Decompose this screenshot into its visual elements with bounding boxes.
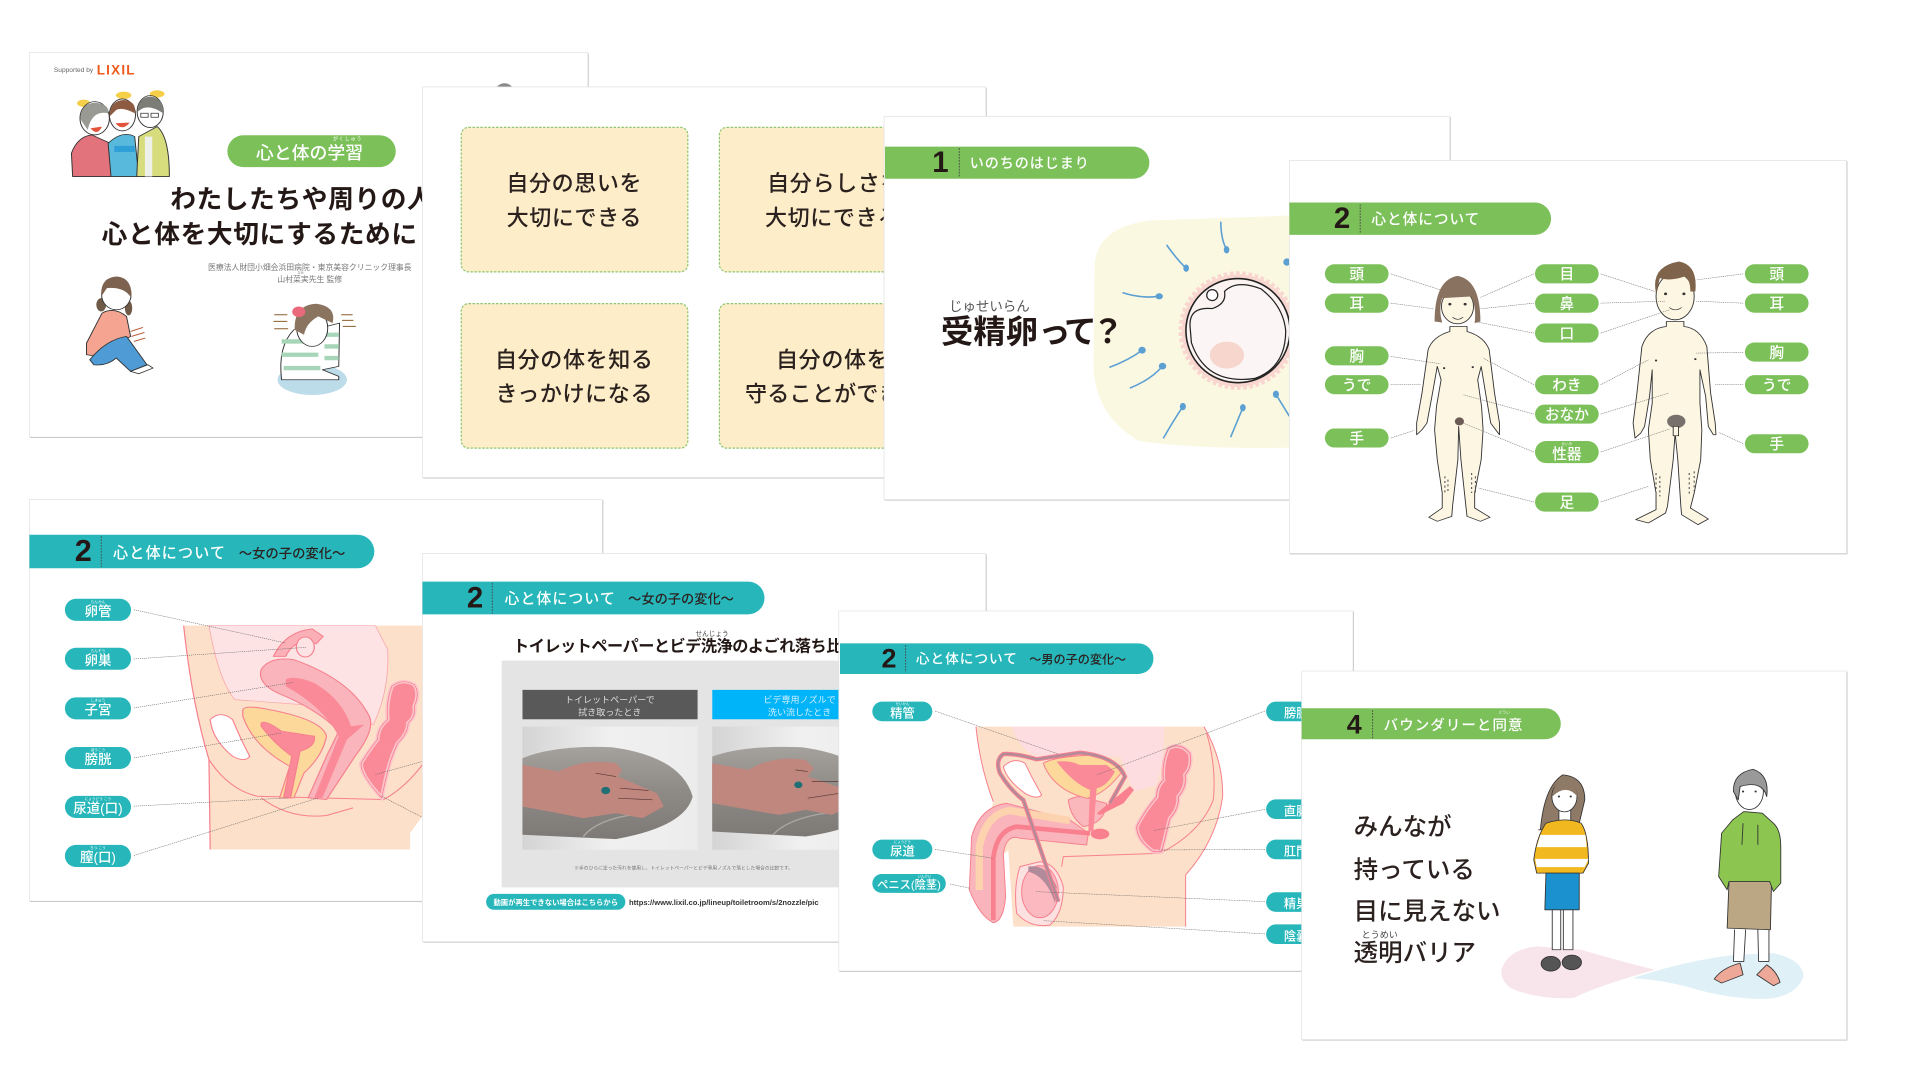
card: 自分の体を知る — [461, 304, 688, 448]
labels: centre column pills: 足 — [1560, 495, 1575, 511]
header: いのちのはじまり: いのちのはじまり — [970, 155, 1090, 171]
labels: male anatomy pills: 精管 — [890, 706, 915, 721]
panel: slide 8 boundary and consent — [1302, 671, 1847, 1040]
labels: male anatomy pills: せいかん — [896, 701, 910, 706]
label: toilet paper bar: トイレットペーパーで — [565, 695, 655, 705]
labels: male anatomy pills: ペニス(陰茎) — [877, 877, 941, 891]
header: バウンダリーと同意: バウンダリーと同意 — [1384, 716, 1524, 734]
card: 自分の体を守ることができる: 守ることができる — [745, 382, 923, 407]
panel: slide 5 female anatomy — [29, 500, 603, 902]
header: 心と体について 男の子の変化: 2 — [881, 643, 896, 673]
panel: slide 3 fertilised egg — [884, 116, 1451, 500]
photo: hand after toilet paper — [522, 727, 698, 850]
labels: male anatomy pills: 精巣 — [1284, 896, 1308, 911]
labels: left column pills: 耳 — [1349, 297, 1364, 313]
heading: comparison title: せんじょう — [696, 630, 729, 638]
icon: girl with headache — [273, 304, 356, 395]
illustration: egg and sperm — [1093, 214, 1322, 448]
header: 心と体について 男の子の変化: 心と体について — [916, 652, 1018, 667]
labels: female anatomy pills: 膀胱 — [85, 751, 112, 767]
text: supervisor — [208, 262, 412, 284]
card: 自分の思いを大切にできる: 大切にできる — [507, 205, 642, 230]
labels: centre column pills: わき — [1552, 377, 1582, 394]
text: みんなが持っている目に見えない透明バリア: とうめい — [1362, 930, 1398, 940]
labels: female anatomy pills: 膣(口) — [80, 850, 116, 865]
labels: right column pills: 手 — [1769, 436, 1784, 453]
labels: female anatomy pills: らんかん — [91, 599, 106, 604]
card: 自分の体を知る: きっかけになる — [495, 382, 653, 407]
labels: centre column pills: せいき — [1561, 441, 1573, 446]
panel: slide 1 cover — [29, 53, 588, 438]
labels: male anatomy pills — [872, 701, 1326, 944]
text: みんなが持っている目に見えない透明バリア — [1354, 813, 1500, 967]
header: バウンダリーと同意 — [1302, 708, 1561, 739]
labels: right column pills: うで — [1762, 377, 1791, 394]
header: 心と体について 女の子の変化: 2 — [467, 581, 483, 614]
labels: female anatomy pills: ちつ こう — [90, 845, 106, 850]
labels: female anatomy pills — [65, 599, 131, 867]
logo: supported by LIXIL — [54, 63, 136, 78]
labels: male anatomy pills: 直腸 — [1284, 803, 1308, 818]
icon: girl holding stomach — [87, 276, 153, 374]
label: bidet bar: 洗い流したとき — [768, 707, 831, 718]
title: わたしたちや周りの人 — [170, 185, 433, 214]
label: bidet bar — [712, 690, 887, 719]
card: 自分の体を守ることができる — [719, 304, 946, 448]
chart: male anatomy diagram — [935, 711, 1265, 934]
panel: grey video frame — [502, 661, 869, 887]
card: 自分の体を知る: 自分の体を知る — [495, 347, 654, 372]
logo: supported by LIXIL: LIXIL — [97, 63, 136, 78]
header: 心と体について 男の子の変化: ～男の子の変化～ — [1029, 651, 1126, 666]
header: 心と体について: 2 — [1334, 202, 1350, 235]
header: 心と体について 女の子の変化: 心と体について — [113, 545, 226, 562]
header: いのちのはじまり: 1 — [932, 146, 949, 179]
label: toilet paper bar — [522, 690, 698, 719]
labels: female anatomy pills: 卵巣 — [85, 652, 112, 668]
labels: female anatomy pills: にょうどう こう — [85, 796, 111, 801]
header: いのちのはじまり — [885, 146, 1149, 179]
card: 自分の体を守ることができる: 自分の体を — [776, 347, 889, 372]
labels: centre column pills: おなか — [1545, 407, 1589, 424]
labels: left column pills — [1325, 264, 1389, 448]
header: 心と体について — [1289, 202, 1551, 235]
illustration: girl and boy with barrier — [1501, 769, 1804, 999]
panel: slide 2 reasons — [422, 87, 986, 478]
icon: three friends — [71, 90, 169, 177]
labels: female anatomy pills: しきゅう — [91, 698, 105, 703]
card: 自分らしさを大切にできる: 大切にできる — [765, 205, 900, 230]
labels: male anatomy pills: 尿道 — [890, 844, 915, 859]
labels: right column pills: 胸 — [1769, 345, 1784, 362]
text: みんなが持っている目に見えない透明バリア: みんなが — [1354, 813, 1452, 841]
badge: video link — [486, 894, 625, 910]
header: 心と体について 女の子の変化: 心と体について — [504, 591, 616, 608]
labels: right column pills: 耳 — [1769, 297, 1784, 313]
panel: slide 7 male anatomy — [839, 611, 1354, 972]
text: supervisor: 山村菜実先生 監修 — [277, 274, 342, 284]
labels: female anatomy pills: 卵管 — [85, 603, 111, 619]
text: みんなが持っている目に見えない透明バリア: 透明バリア — [1354, 939, 1476, 967]
text: みんなが持っている目に見えない透明バリア: 持っている — [1354, 856, 1475, 884]
title: 心と体を大切にするために — [102, 220, 418, 249]
card: 自分の思いを大切にできる — [461, 127, 688, 272]
labels: female anatomy pills: 子宮 — [85, 702, 111, 717]
illustration: female and male bodies with leader lines — [1391, 262, 1743, 525]
badge: 心と体の学習 — [227, 135, 396, 167]
header: バウンダリーと同意: 4 — [1347, 709, 1362, 739]
card: 自分らしさを大切にできる — [719, 127, 946, 272]
icon: grey head peeking — [495, 83, 514, 103]
labels: male anatomy pills: 膀胱 — [1284, 706, 1308, 721]
logo: supported by LIXIL: Supported by — [54, 67, 94, 74]
card: 自分らしさを大切にできる: 自分らしさを — [767, 171, 903, 196]
chart: female anatomy diagram — [134, 610, 449, 855]
labels: male anatomy pills: 肛門 — [1284, 845, 1308, 859]
labels: left column pills: 手 — [1349, 430, 1364, 447]
badge: 心と体の学習: 心と体の学習 — [256, 143, 363, 163]
labels: centre column pills: 性器 — [1552, 446, 1582, 463]
labels: right column pills — [1745, 264, 1809, 453]
text: みんなが持っている目に見えない透明バリア: 目に見えない — [1354, 899, 1500, 926]
badge: 心と体の学習: がくしゅう — [333, 136, 362, 143]
label: toilet paper bar: 拭き取ったとき — [578, 707, 641, 718]
badge: video link: 動画が再生できない場合はこちらから — [493, 898, 618, 907]
text: photo caption: ※手のひらに塗った汚れを使用し、トイレットペーパーとビデ専用ノズルで落とした場合の比較です。 — [574, 864, 793, 871]
labels: female anatomy pills: ぼうこう — [91, 747, 105, 752]
header: 心と体について: 心と体について — [1371, 211, 1480, 228]
header: 心と体について 女の子の変化: 2 — [75, 534, 92, 568]
card: 自分の思いを大切にできる: 自分の思いを — [506, 171, 642, 196]
header: 心と体について 男の子の変化 — [840, 643, 1153, 674]
text: url: https://www.lixil.co.jp/lineup/toiletroom/s/2nozzle/pic — [629, 898, 819, 907]
panel: slide 6 toilet paper vs bidet — [422, 553, 986, 942]
labels: left column pills: 頭 — [1349, 266, 1364, 283]
labels: male anatomy pills: 陰嚢 — [1284, 928, 1308, 943]
labels: left column pills: 胸 — [1349, 348, 1364, 365]
labels: centre column pills: 目 — [1560, 267, 1574, 283]
panel: slide 4 body parts — [1289, 160, 1847, 554]
label: bidet bar: ビデ専用ノズルで — [763, 694, 836, 705]
title — [102, 185, 433, 249]
header: バウンダリーと同意: どうい — [1499, 709, 1510, 714]
labels: centre column pills — [1535, 264, 1599, 512]
labels: centre column pills: 口 — [1560, 326, 1574, 342]
labels: centre column pills: 鼻 — [1560, 295, 1574, 313]
labels: male anatomy pills: いんけい — [918, 873, 932, 878]
heading: 受精卵って？: じゅせいらん — [949, 299, 1030, 314]
header: 心と体について 女の子の変化 — [422, 581, 765, 614]
labels: female anatomy pills: らんそう — [91, 648, 105, 653]
text: supervisor: なみ — [298, 270, 304, 275]
heading: 受精卵って？: 受精卵って？ — [941, 314, 1119, 350]
heading: comparison title: トイレットペーパーとビデ洗浄のよごれ落ち比較 — [513, 636, 858, 655]
labels: female anatomy pills: 尿道(口) — [73, 801, 123, 816]
labels: right column pills: 頭 — [1769, 266, 1784, 283]
text: supervisor: 医療法人財団小畑会浜田病院・東京美容クリニック理事長 — [208, 262, 412, 272]
labels: male anatomy pills: にょうどう — [894, 839, 911, 844]
header: 心と体について 女の子の変化: ～女の子の変化～ — [628, 591, 734, 606]
header: 心と体について 女の子の変化: ～女の子の変化～ — [239, 546, 345, 561]
photo: hand after bidet — [712, 727, 887, 850]
labels: left column pills: うで — [1342, 377, 1371, 394]
header: 心と体について 女の子の変化 — [29, 534, 374, 568]
